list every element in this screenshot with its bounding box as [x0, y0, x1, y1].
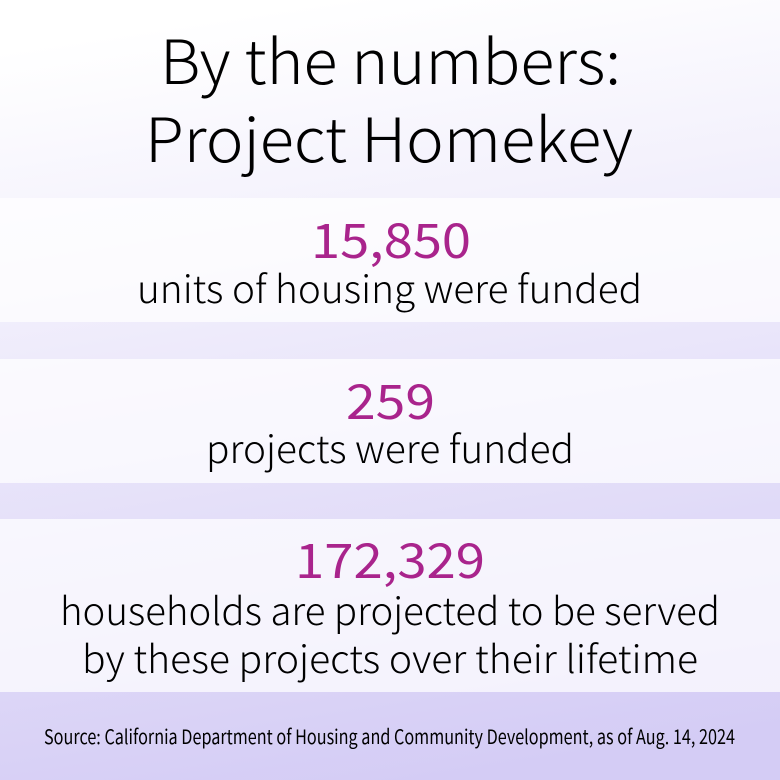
- panel: projects funded: [0, 359, 780, 483]
- panel: units funded: units of housing were funded: [137, 259, 642, 314]
- panel: projects funded: 259: [346, 363, 435, 433]
- panel: units funded: [0, 198, 780, 322]
- panel: households served: [0, 519, 780, 692]
- panel: households served: by these projects over their lifetime: [82, 629, 698, 684]
- panel: households served: households are projected to be served: [60, 581, 720, 636]
- title: Project Homekey: [145, 91, 633, 180]
- title: By the numbers:: [160, 13, 621, 102]
- panel: households served: 172,329: [295, 522, 485, 592]
- title: [145, 13, 633, 180]
- panel: projects funded: projects were funded: [206, 419, 574, 474]
- panel: units funded: 15,850: [311, 202, 471, 272]
